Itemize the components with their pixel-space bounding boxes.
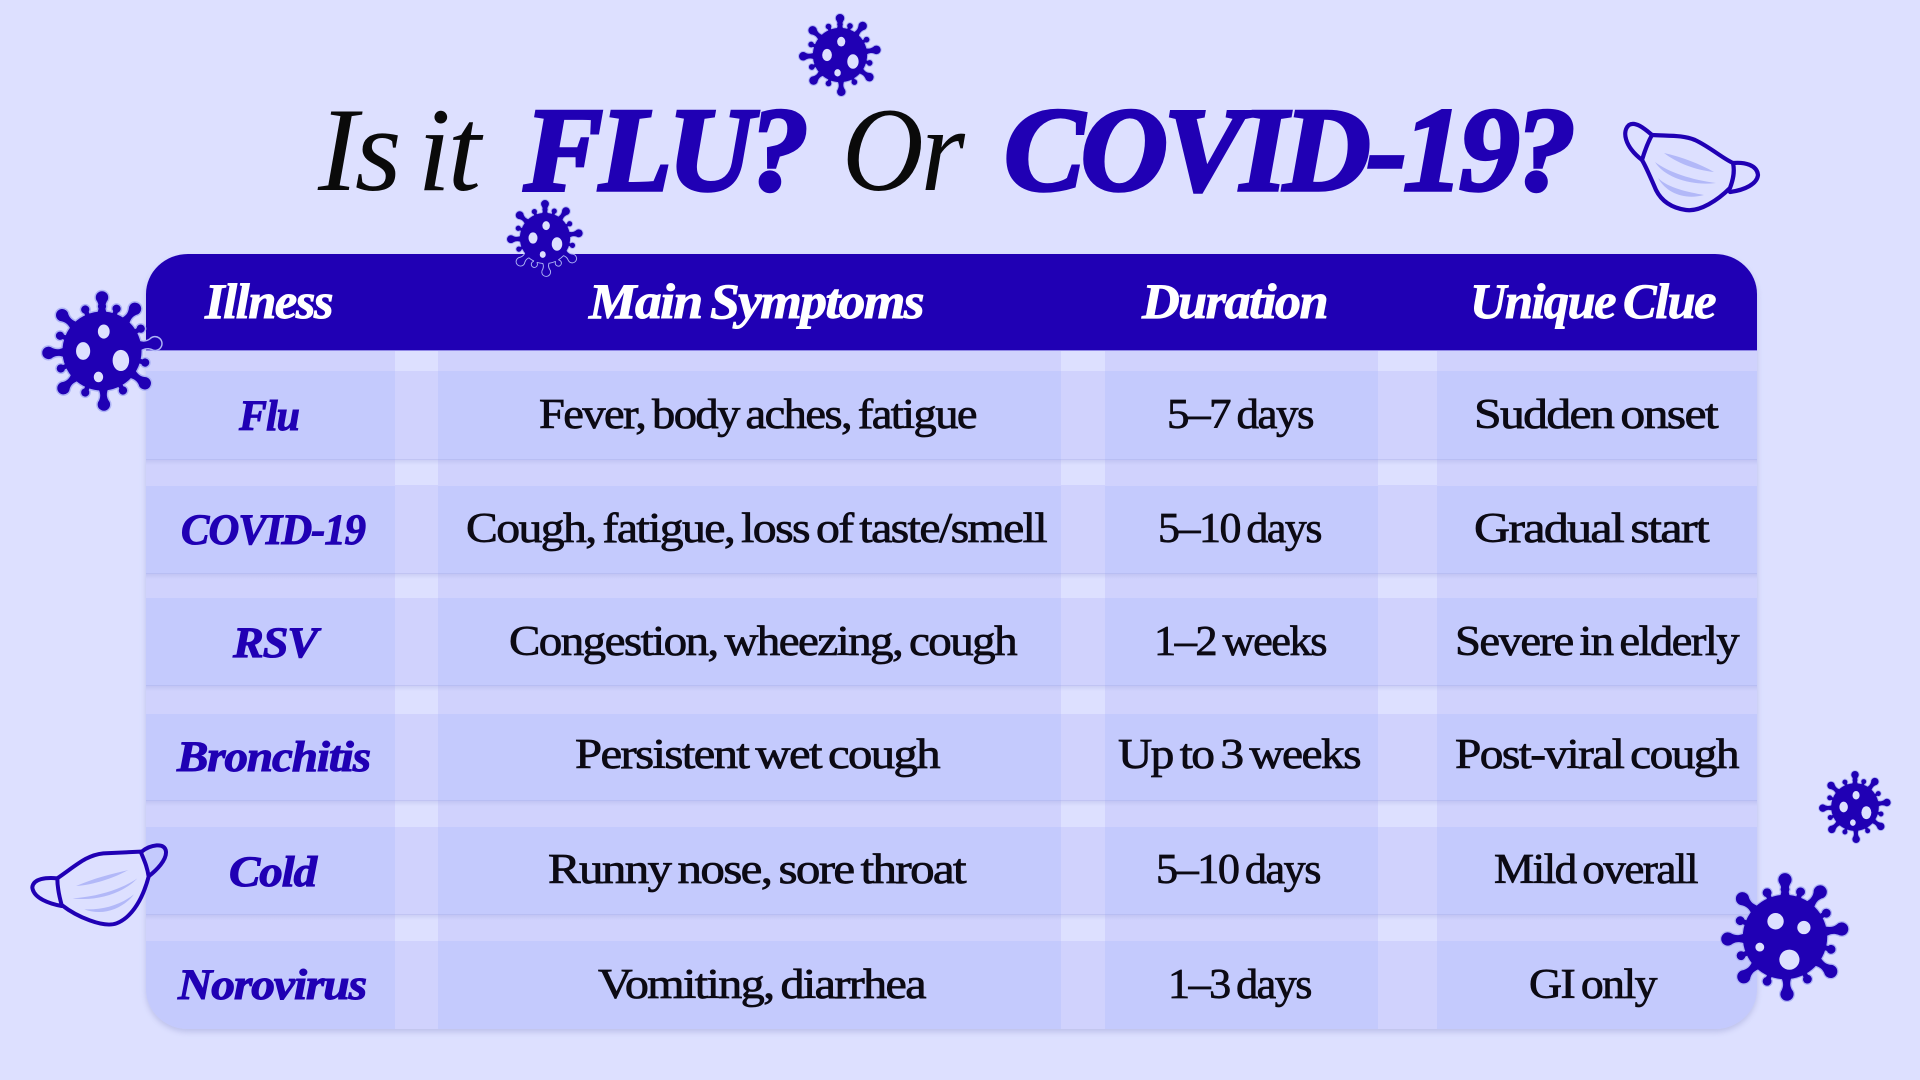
row: COVID-19: [181, 506, 1710, 554]
table: [146, 254, 1757, 1029]
row: Bronchitis: Persistent wet cough: [575, 732, 941, 778]
row: COVID-19: Gradual start: [1474, 506, 1710, 552]
row: Flu: Flu: [238, 393, 299, 440]
row: Bronchitis: Up to 3 weeks: [1118, 732, 1360, 778]
row: Norovirus: GI only: [1529, 962, 1658, 1008]
row: Norovirus: Vomiting, diarrhea: [598, 962, 927, 1008]
row: Bronchitis: Post-viral cough: [1455, 732, 1740, 778]
row: Norovirus: Norovirus: [177, 962, 366, 1009]
table base: [146, 254, 1757, 1029]
row: Cold: [229, 847, 1698, 896]
row: RSV: Congestion, wheezing, cough: [509, 619, 1018, 665]
row: RSV: RSV: [232, 620, 322, 667]
row: RSV: 1–2 weeks: [1154, 619, 1326, 665]
row: Bronchitis: [176, 732, 1740, 781]
column headings: [204, 273, 1716, 329]
column headings: Unique Clue: [1470, 273, 1716, 329]
row: Norovirus: [177, 962, 1658, 1009]
row: COVID-19: COVID-19: [181, 507, 365, 554]
table body cells: [146, 350, 1757, 1029]
icon: mask bottom left: [32, 845, 166, 925]
title: Or: [842, 83, 966, 216]
row: Cold: Cold: [229, 849, 319, 896]
icon: virus left: [42, 291, 162, 411]
row: RSV: Severe in elderly: [1455, 619, 1740, 665]
row: Cold: Runny nose, sore throat: [548, 847, 967, 893]
table header bar: [146, 254, 1757, 351]
row: Cold: 5–10 days: [1156, 847, 1320, 893]
row: Cold: Mild overall: [1494, 847, 1698, 893]
row: COVID-19: Cough, fatigue, loss of taste/smell: [466, 506, 1047, 552]
column headings: Illness: [204, 273, 332, 329]
row: Flu: Sudden onset: [1474, 392, 1719, 438]
icon: virus right small: [1819, 771, 1891, 843]
icon: mask top right: [1625, 124, 1758, 210]
row: Flu: [238, 392, 1719, 440]
row: COVID-19: 5–10 days: [1158, 506, 1321, 552]
row: Bronchitis: Bronchitis: [176, 734, 370, 781]
title: COVID-19?: [1004, 83, 1572, 216]
column headings: Main Symptoms: [588, 273, 923, 329]
icon: virus top centre: [799, 14, 881, 96]
row: Flu: Fever, body aches, fatigue: [539, 392, 977, 438]
title: Is it: [317, 83, 484, 216]
row: Flu: 5–7 days: [1167, 392, 1313, 438]
title: FLU?: [523, 83, 805, 216]
icon: virus right large: [1721, 873, 1849, 1001]
title: [317, 83, 1572, 216]
icon: virus above table: [507, 200, 583, 276]
column headings: Duration: [1141, 273, 1327, 329]
row: Norovirus: 1–3 days: [1168, 962, 1311, 1008]
row: RSV: [232, 619, 1740, 667]
